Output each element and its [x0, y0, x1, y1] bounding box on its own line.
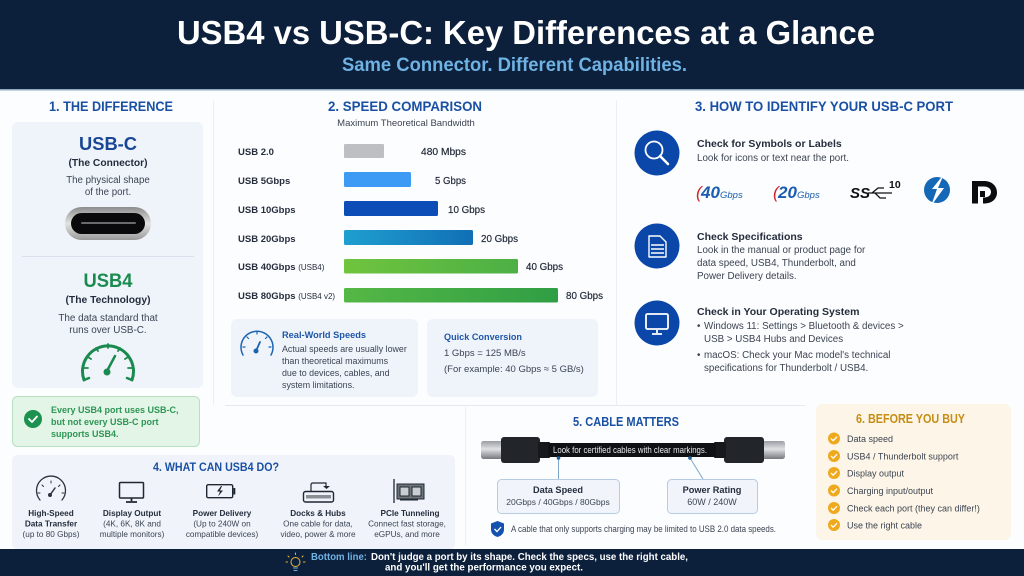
heading: speed comparison: 2. SPEED COMPARISON — [328, 98, 482, 114]
conversion text: 1 Gbps = 125 MB/s — [444, 348, 526, 359]
panel: 3. how to identify your USB-C port — [634, 98, 997, 374]
callout text: Every USB4 port uses USB-C, — [51, 405, 179, 415]
step: specifications — [634, 224, 866, 282]
card: connector and technology — [12, 122, 203, 388]
feature text: Docks & Hubs — [290, 509, 346, 518]
step body: Look for icons or text near the port. — [697, 153, 849, 164]
heading: the difference: 1. THE DIFFERENCE — [49, 99, 173, 114]
card title: Quick Conversion — [444, 332, 522, 343]
feature text: High-Speed — [28, 509, 74, 518]
feature text: Power Delivery — [193, 509, 252, 518]
card body: due to devices, cables, and — [282, 368, 390, 378]
card: real-world speeds — [231, 319, 418, 397]
step body: macOS: Check your Mac model's technical — [704, 350, 890, 361]
logo: 20Gbps: ( — [773, 183, 781, 202]
feature text: multiple monitors) — [100, 530, 165, 539]
step body: • — [697, 350, 701, 361]
icon: PCIe card — [394, 479, 424, 503]
logo row — [696, 174, 997, 206]
card: quick conversion — [427, 319, 598, 397]
icon: dock — [304, 483, 334, 502]
feature text: eGPUs, and more — [374, 530, 440, 539]
technology caption: (The Technology) — [66, 295, 150, 306]
title: USB4 vs USB-C: Key Differences at a Glance — [177, 14, 875, 51]
feature text: video, power & more — [280, 530, 356, 539]
feature: high-speed data transfer — [23, 476, 80, 539]
heading: cable matters: 5. CABLE MATTERS — [573, 415, 679, 429]
feature: power delivery — [186, 485, 258, 539]
chart subtitle: Maximum Theoretical Bandwidth — [337, 118, 475, 129]
checklist — [828, 432, 980, 531]
conversion text: (For example: 40 Gbps ≈ 5 GB/s) — [444, 364, 584, 375]
icon: check circle — [24, 410, 42, 428]
logo: 40Gbps: ( — [696, 183, 704, 202]
panel: 5. cable matters — [481, 415, 785, 537]
USB-C label: USB-C — [79, 133, 137, 154]
step body: specifications for Thunderbolt / USB4. — [704, 363, 868, 374]
card title: Real-World Speeds — [282, 330, 366, 341]
row: USB 2.0: 480 Mbps — [421, 147, 466, 158]
step body: Look in the manual or product page for — [697, 245, 866, 256]
icon: USB-C port — [65, 207, 151, 240]
bottom line text, first row: Don't judge a port by its shape. Check the specs, use the right cable, — [371, 552, 688, 563]
row: USB 80Gbps: USB 80Gbps (USB4 v2) — [238, 291, 335, 302]
connector caption: (The Connector) — [68, 158, 148, 169]
cable note: A cable that only supports charging may be limited to USB 2.0 data speeds. — [511, 524, 776, 534]
icon: battery — [207, 485, 235, 498]
row: USB 10Gbps: 10 Gbps — [448, 205, 485, 216]
item: check each port: Check each port (they can differ!) — [847, 504, 980, 514]
icon: display — [120, 482, 144, 502]
row: USB 20Gbps: 20 Gbps — [481, 234, 518, 245]
heading: what can USB4 do: 4. WHAT CAN USB4 DO? — [153, 460, 279, 474]
panel: 2. speed comparison — [231, 98, 603, 397]
step body: USB > USB4 Hubs and Devices — [704, 334, 843, 345]
callout: data speed: Data Speed — [533, 485, 583, 495]
logo: SuperSpeed USB 10: 10 — [889, 179, 901, 191]
icon: magnifier — [634, 130, 680, 176]
row: USB 5Gbps: 5 Gbps — [435, 176, 466, 187]
logo: SuperSpeed USB 10 — [850, 179, 901, 202]
feature text: Data Transfer — [25, 520, 78, 528]
feature text: (Up to 240W on — [193, 520, 251, 528]
step title: Check in Your Operating System — [697, 306, 859, 318]
card body: than theoretical maximums — [282, 356, 389, 366]
bottom line label: Bottom line: — [311, 552, 367, 563]
item: charging input/output: Charging input/output — [847, 486, 934, 496]
item: use the right cable — [828, 519, 922, 531]
step title: Check for Symbols or Labels — [697, 138, 842, 150]
feature text: compatible devices) — [186, 530, 258, 539]
icon: blue gauge — [241, 331, 273, 355]
item: charging input/output — [828, 484, 934, 496]
callout: USB4 and USB-C relation — [12, 396, 200, 446]
icon: monitor — [634, 300, 680, 346]
panel: 1. the difference — [12, 99, 203, 388]
feature text: (4K, 6K, 8K and — [103, 520, 161, 528]
heading: before you buy: 6. BEFORE YOU BUY — [856, 412, 966, 426]
logo: SuperSpeed USB 10: SS — [850, 185, 870, 202]
logo: 40Gbps: 40 — [700, 183, 720, 202]
step body: Power Delivery details. — [697, 271, 797, 282]
callout text: supports USB4. — [51, 429, 119, 439]
panel: 4. what can USB4 do — [12, 455, 455, 549]
callout: power rating: Power Rating — [683, 485, 741, 495]
feature text: (up to 80 Gbps) — [23, 530, 80, 539]
item: display output — [828, 467, 905, 479]
logo: 20Gbps: Gbps — [797, 190, 820, 201]
feature text: Connect fast storage, — [368, 520, 446, 528]
logo: 40Gbps: Gbps — [720, 190, 743, 201]
logo: 20Gbps: 20 — [777, 183, 797, 202]
header banner — [0, 0, 1024, 90]
heading: identify port: 3. HOW TO IDENTIFY YOUR USB-C PORT — [695, 98, 953, 114]
bar chart — [238, 144, 603, 302]
icon: shield — [491, 521, 504, 537]
card body: system limitations. — [282, 380, 354, 390]
row: USB 20Gbps: USB 20Gbps — [238, 234, 296, 245]
connector description: of the port. — [85, 187, 131, 198]
item: use the right cable: Use the right cable — [847, 520, 922, 530]
feature: PCIe tunneling — [368, 479, 446, 539]
illustration: USB-C cable — [481, 437, 785, 463]
technology description: runs over USB-C. — [69, 325, 147, 336]
logo: 20Gbps — [773, 183, 820, 202]
feature text: PCIe Tunneling — [381, 509, 439, 518]
step body: Windows 11: Settings > Bluetooth & devices > — [704, 321, 904, 332]
step title: Check Specifications — [697, 231, 803, 243]
feature text: Display Output — [103, 509, 161, 518]
item: display output: Display output — [847, 468, 905, 478]
step body: • — [697, 321, 701, 332]
item: USB4 / Thunderbolt support: USB4 / Thunderbolt support — [847, 452, 959, 462]
row: USB 40Gbps — [238, 259, 563, 274]
subtitle: Same Connector. Different Capabilities. — [342, 55, 687, 76]
row: USB 40Gbps: 40 Gbps — [526, 262, 563, 273]
logo: Thunderbolt — [924, 174, 950, 206]
callout: data speed — [498, 480, 620, 514]
callout: power rating — [668, 480, 758, 514]
row: USB 2.0: USB 2.0 — [238, 147, 274, 158]
icon: light bulb — [286, 553, 305, 570]
connector description: The physical shape — [66, 175, 150, 186]
cable marking text: Look for certified cables with clear markings. — [553, 445, 707, 455]
panel: 6. before you buy — [816, 404, 1011, 540]
logo: DisplayPort — [972, 181, 997, 204]
row: USB 80Gbps: 80 Gbps — [566, 291, 603, 302]
USB4 label: USB4 — [84, 271, 133, 292]
feature: display output — [100, 482, 165, 539]
step: symbols or labels — [634, 130, 997, 206]
icon: gauge — [37, 476, 66, 500]
callout text: but not every USB-C port — [51, 417, 159, 427]
step: operating system — [634, 300, 904, 374]
row: USB 10Gbps: USB 10Gbps — [238, 205, 296, 216]
callout leader lines — [557, 456, 703, 479]
callout: data speed: 20Gbps / 40Gbps / 80Gbps — [506, 497, 610, 507]
row: USB 5Gbps — [238, 172, 466, 187]
feature: docks and hubs — [280, 483, 356, 539]
card body: Actual speeds are usually lower — [282, 344, 407, 354]
row: USB 2.0 — [238, 144, 466, 158]
row: USB 80Gbps — [238, 288, 603, 302]
callout: power rating: 60W / 240W — [687, 497, 737, 507]
row: USB 40Gbps: USB 40Gbps (USB4) — [238, 262, 325, 273]
bottom line text, second row: and you'll get the performance you expect. — [385, 562, 583, 574]
feature text: One cable for data, — [283, 520, 353, 528]
icon: document — [634, 224, 680, 268]
step body: data speed, USB4, Thunderbolt, and — [697, 258, 856, 269]
row: USB 10Gbps — [238, 201, 485, 216]
technology description: The data standard that — [58, 313, 158, 324]
row: USB 20Gbps — [238, 230, 518, 245]
item: data speed — [828, 432, 893, 444]
footer: bottom line — [0, 549, 1024, 576]
logo: 40Gbps — [696, 183, 743, 202]
icon: green gauge — [82, 344, 134, 380]
item: data speed: Data speed — [847, 434, 893, 444]
row: USB 5Gbps: USB 5Gbps — [238, 176, 290, 187]
